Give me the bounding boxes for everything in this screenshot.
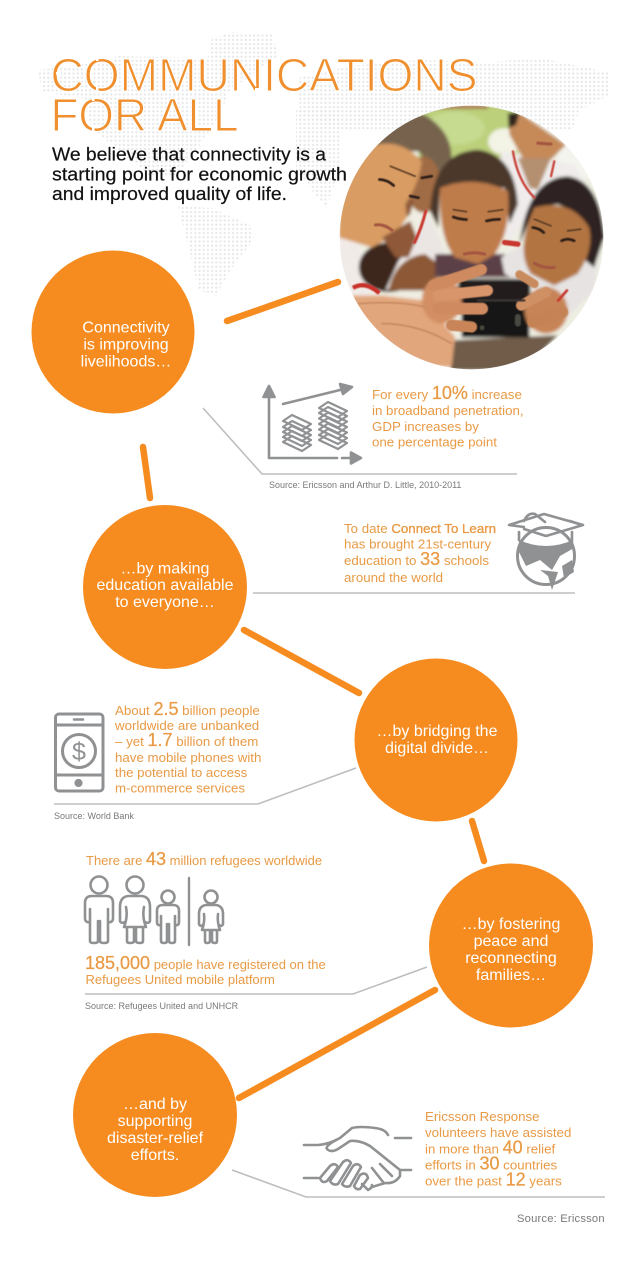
title xyxy=(50,49,477,141)
text: broadband statistic: 10% increase xyxy=(432,383,522,403)
source: Ericsson: Source: Ericsson xyxy=(517,1213,605,1225)
circle: disaster relief: disaster-relief xyxy=(107,1130,204,1147)
circle: peace and families: …by fostering xyxy=(462,916,560,933)
text: disaster relief statistic: over the past xyxy=(425,1174,506,1188)
icon: mobile phone with dollar coin: $ xyxy=(72,738,86,766)
circle: peace and families: reconnecting xyxy=(465,950,557,967)
source: World Bank: Source: World Bank xyxy=(54,811,134,821)
text: disaster relief statistic: 30 countries xyxy=(479,1154,557,1174)
callout leader lines xyxy=(54,408,605,1197)
circle: education: to everyone… xyxy=(115,594,215,611)
background: dotted world map xyxy=(38,32,608,296)
text: refugees registered statistic: 185,000 xyxy=(85,953,150,973)
text: refugees statistic: 43 million refugees worldwide xyxy=(146,849,322,869)
title: FOR ALL xyxy=(50,89,238,141)
circle: peace and families xyxy=(429,864,593,1028)
circle: disaster relief: …and by xyxy=(123,1096,187,1113)
text: unbanked statistic: 1.7 billion of them xyxy=(148,730,258,750)
icon: refugee family figures xyxy=(85,876,223,945)
title: COMMUNICATIONS xyxy=(50,49,477,101)
text: unbanked statistic: About xyxy=(115,703,153,718)
circle: connectivity: is improving xyxy=(83,336,169,354)
icon: handshake xyxy=(304,1127,411,1190)
circle: connectivity: Connectivity xyxy=(82,320,170,336)
text: unbanked statistic: worldwide are unbanked xyxy=(114,718,259,733)
circle: peace and families: families… xyxy=(476,967,546,984)
text: connect to learn statistic: around the world xyxy=(344,570,443,585)
circle: education: …by making xyxy=(121,560,209,578)
text: disaster relief statistic: 12 years xyxy=(506,1170,562,1190)
text: disaster relief statistic: Ericsson Response xyxy=(425,1109,540,1124)
circle: education xyxy=(83,505,247,669)
text: unbanked statistic: m-commerce services xyxy=(115,780,245,796)
text: refugees registered statistic: Refugees United mobile platform xyxy=(86,972,275,987)
source: Ericsson and Arthur D. Little: Source: Ericsson and Arthur D. Little, 2010-2011 xyxy=(269,480,461,490)
intro text: starting point for economic growth xyxy=(52,164,347,184)
text: unbanked statistic: have mobile phones with xyxy=(115,750,261,765)
text: disaster relief statistic: efforts in xyxy=(425,1158,479,1172)
text: broadband statistic: GDP increases by xyxy=(372,419,479,434)
circle: disaster relief: supporting xyxy=(118,1113,192,1130)
text: unbanked statistic: 2.5 billion people xyxy=(153,699,260,719)
connector lines xyxy=(143,282,484,1098)
circle: connectivity: livelihoods… xyxy=(81,354,171,370)
source: Refugees United and UNHCR: Source: Refugees United and UNHCR xyxy=(85,1001,239,1011)
text: broadband statistic: For every xyxy=(372,387,432,402)
text: unbanked statistic: the potential to access xyxy=(115,765,248,780)
circle: peace and families: peace and xyxy=(474,933,548,950)
circle: connectivity xyxy=(32,250,194,414)
text: connect to learn statistic: 33 schools xyxy=(420,549,489,569)
text: connect to learn statistic: has brought 21st-century xyxy=(344,536,491,552)
circle: education: education available xyxy=(96,577,234,594)
circle: disaster relief: efforts. xyxy=(131,1147,179,1164)
text: broadband statistic: one percentage point xyxy=(372,434,497,450)
text: refugees statistic: There are xyxy=(86,853,146,868)
text: disaster relief statistic: 40 relief xyxy=(503,1138,555,1158)
circle: digital divide: …by bridging the xyxy=(377,723,498,740)
circle: digital divide xyxy=(354,658,518,822)
text: broadband statistic: in broadband penetration, xyxy=(372,403,524,418)
text: unbanked statistic: – yet xyxy=(115,734,148,749)
intro text: We believe that connectivity is a xyxy=(52,144,327,164)
text: refugees registered statistic: people have registered on the xyxy=(150,957,326,972)
icon: growth chart with money stacks xyxy=(264,384,361,464)
circle: disaster relief xyxy=(73,1033,237,1197)
text: connect to learn statistic: To date xyxy=(344,521,391,536)
text: connect to learn statistic: Connect To Learn xyxy=(391,521,496,536)
circle: digital divide: digital divide… xyxy=(385,740,489,757)
text: disaster relief statistic: volunteers have assisted xyxy=(425,1125,571,1140)
intro text: and improved quality of life. xyxy=(52,184,287,204)
photo: children looking at a mobile phone xyxy=(339,105,604,370)
icon: graduation cap on globe xyxy=(509,514,583,590)
text: connect to learn statistic: education to xyxy=(344,553,420,568)
icon: mobile phone with dollar coin xyxy=(56,714,103,791)
text: disaster relief statistic: in more than xyxy=(425,1142,503,1156)
intro text xyxy=(52,144,347,204)
